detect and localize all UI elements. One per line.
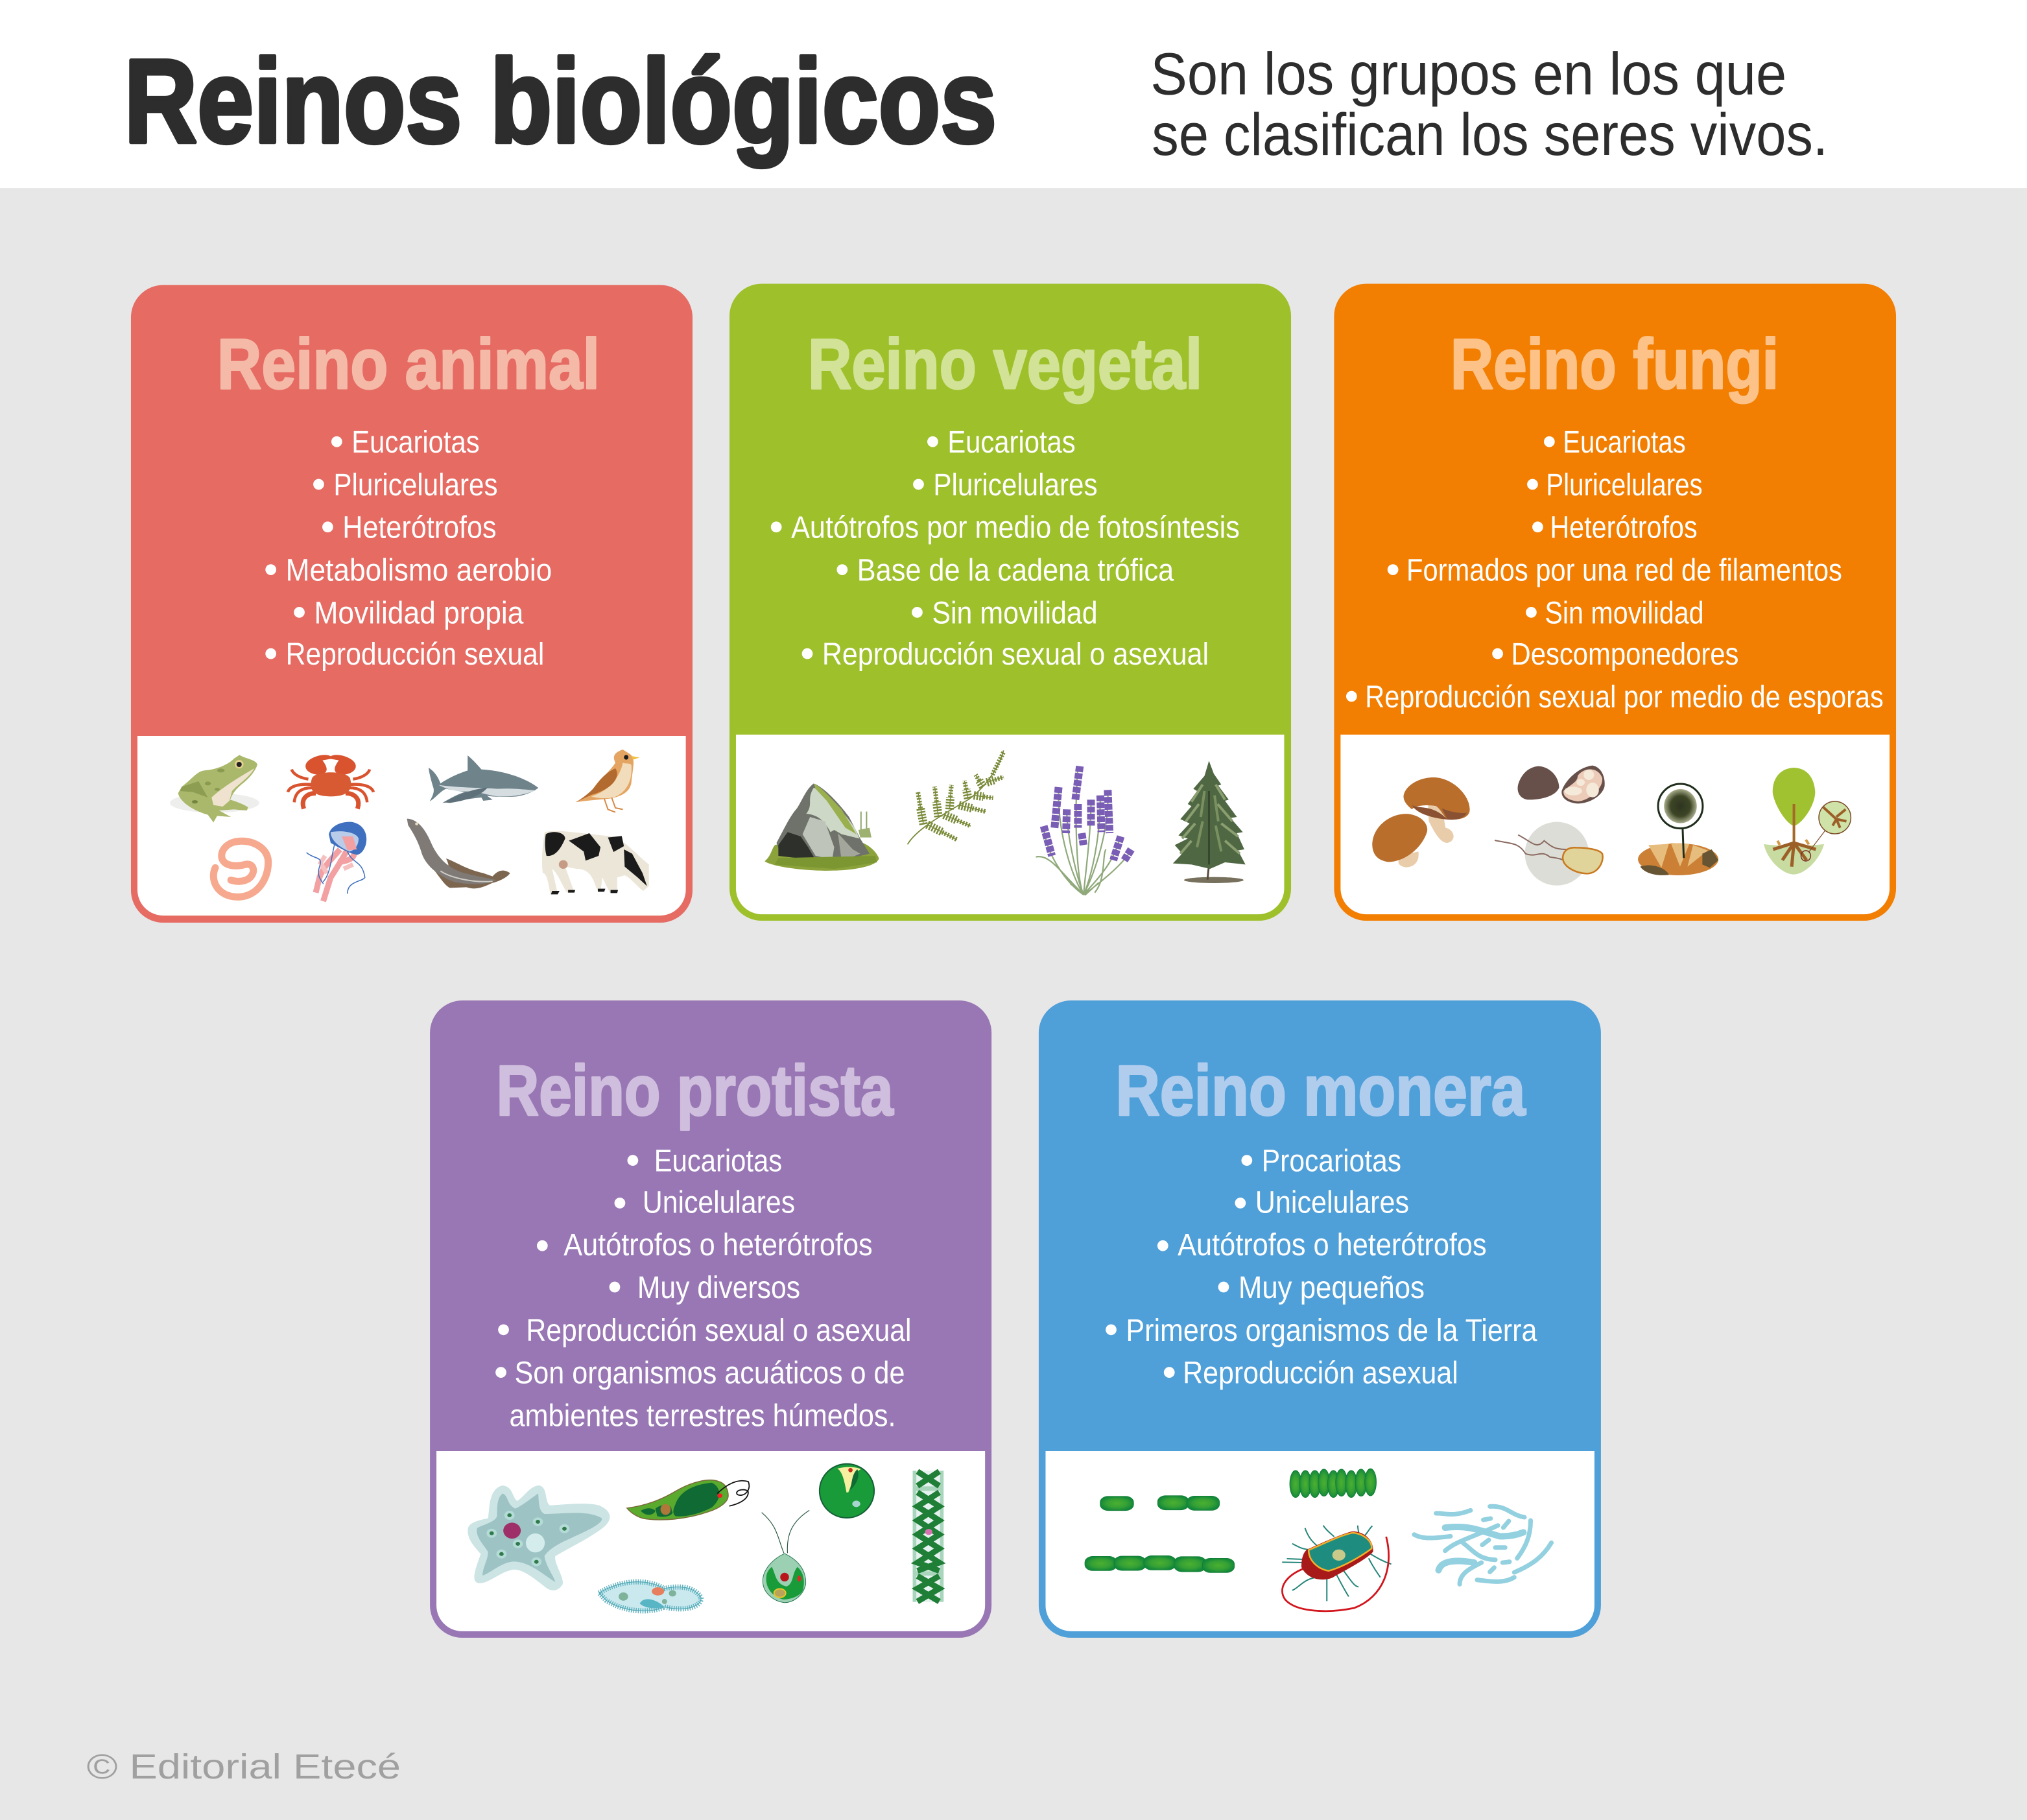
icon: blue filaments xyxy=(1414,1506,1551,1584)
icon: fir tree xyxy=(1173,761,1246,883)
panel: reino monera xyxy=(1039,1000,1601,1638)
icon: green rods xyxy=(1085,1496,1235,1572)
feature list: Unicelulares xyxy=(1255,1185,1409,1220)
icon: spirogyra xyxy=(913,1471,943,1602)
footer credit: © Editorial Etecé xyxy=(87,1747,401,1786)
heading: Reino fungi xyxy=(1451,325,1779,404)
icon: frog xyxy=(170,755,259,822)
icon: amoeba xyxy=(468,1485,610,1590)
feature list: Pluricelulares xyxy=(1546,468,1703,502)
feature list: Base de la cadena trófica xyxy=(857,554,1174,588)
icon: bread mould xyxy=(1638,784,1718,875)
panel: reino vegetal xyxy=(729,284,1291,921)
feature list: Heterótrofos xyxy=(1550,511,1698,545)
icon: bird xyxy=(576,750,639,812)
heading: Reino vegetal xyxy=(808,325,1202,404)
feature list: Reproducción sexual o asexual xyxy=(822,637,1209,672)
heading: Reino animal xyxy=(217,325,600,404)
feature list xyxy=(1346,425,1884,715)
feature list: ambientes terrestres húmedos. xyxy=(509,1399,896,1433)
icon: chlamydomonas xyxy=(762,1510,809,1603)
panel: reino protista xyxy=(430,1000,991,1638)
feature list: Eucariotas xyxy=(351,425,480,460)
icon: mycorrhiza xyxy=(1764,768,1851,875)
illustrations: fungi xyxy=(1372,766,1851,886)
icon: shark xyxy=(429,755,538,803)
illustrations: plants xyxy=(765,750,1246,895)
feature list xyxy=(495,1144,912,1433)
icon: jellyfish xyxy=(307,822,366,901)
feature list: Pluricelulares xyxy=(333,468,498,502)
feature list: Pluricelulares xyxy=(933,468,1098,502)
icon: worm xyxy=(213,841,268,897)
icon: fern xyxy=(908,750,1004,844)
feature list: Sin movilidad xyxy=(932,596,1098,630)
icon: crab xyxy=(288,755,373,809)
subtitle xyxy=(1150,41,1828,168)
subtitle: Son los grupos en los que xyxy=(1150,41,1786,108)
feature list: Autótrofos o heterótrofos xyxy=(563,1228,873,1262)
icon: truffles xyxy=(1518,766,1605,803)
icon: mushrooms xyxy=(1372,777,1470,868)
title: Reinos biológicos xyxy=(124,34,997,167)
feature list: Reproducción asexual xyxy=(1183,1356,1458,1391)
feature list: Unicelulares xyxy=(643,1185,795,1220)
icon: green rod stack xyxy=(1290,1469,1377,1498)
feature list: Autótrofos o heterótrofos xyxy=(1178,1228,1487,1262)
illustrations: animals xyxy=(170,750,649,901)
feature list: Sin movilidad xyxy=(1545,596,1704,630)
icon: bacterium cell xyxy=(1282,1526,1392,1611)
icon: cow xyxy=(542,831,649,894)
illustrations: protists xyxy=(468,1464,943,1611)
feature list: Formados por una red de filamentos xyxy=(1406,554,1842,588)
feature list: Reproducción sexual o asexual xyxy=(526,1314,912,1348)
subtitle: se clasifican los seres vivos. xyxy=(1152,102,1828,168)
icon: eel xyxy=(407,819,510,888)
icon: mossy rock xyxy=(765,783,879,871)
feature list: Autótrofos por medio de fotosíntesis xyxy=(791,511,1240,545)
icon: paramecium xyxy=(599,1582,701,1611)
feature list: Eucariotas xyxy=(654,1144,782,1179)
feature list: Muy diversos xyxy=(637,1271,800,1305)
feature list: Reproducción sexual por medio de esporas xyxy=(1365,680,1884,715)
feature list: Movilidad propia xyxy=(314,596,524,630)
header band xyxy=(0,0,2027,188)
feature list: Heterótrofos xyxy=(342,511,497,545)
feature list: Primeros organismos de la Tierra xyxy=(1126,1314,1537,1348)
feature list xyxy=(1106,1144,1537,1391)
feature list: Eucariotas xyxy=(1563,425,1686,460)
icon: euglena xyxy=(627,1480,749,1520)
feature list: Muy pequeños xyxy=(1239,1271,1425,1305)
panel: reino animal xyxy=(131,285,693,923)
feature list: Reproducción sexual xyxy=(286,637,544,672)
feature list: Metabolismo aerobio xyxy=(286,554,552,588)
feature list xyxy=(265,425,552,672)
heading: Reino monera xyxy=(1115,1051,1526,1130)
heading: Reino protista xyxy=(497,1051,894,1130)
illustrations: bacteria xyxy=(1085,1469,1551,1611)
feature list: Descomponedores xyxy=(1511,637,1738,672)
icon: green alga cell xyxy=(820,1464,874,1518)
feature list: Eucariotas xyxy=(947,425,1076,460)
feature list xyxy=(771,425,1240,672)
feature list: Procariotas xyxy=(1262,1144,1401,1179)
panel: reino fungi xyxy=(1334,284,1896,921)
feature list: Son organismos acuáticos o de xyxy=(514,1356,905,1391)
icon: yeast cell xyxy=(1495,822,1603,886)
icon: lavender xyxy=(1036,766,1131,895)
